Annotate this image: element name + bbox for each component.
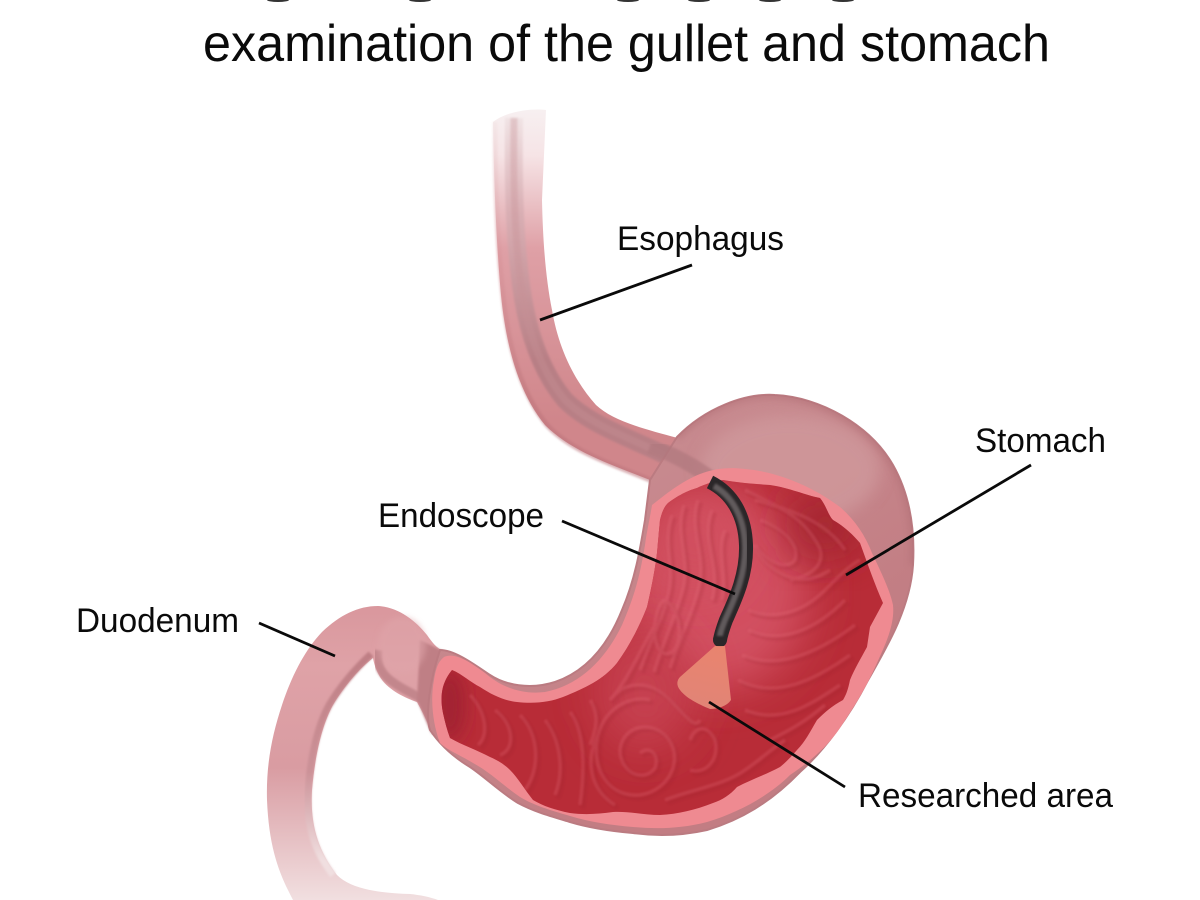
label: Esophagus (540, 220, 784, 320)
esophagus overlap on fundus (650, 446, 716, 482)
label: Duodenum: Duodenum (76, 602, 239, 640)
label: Duodenum (76, 602, 335, 656)
mucosal folds (634, 505, 800, 672)
stomach outer wall (428, 395, 913, 835)
clipped title remnants (267, 0, 854, 2)
label: Stomach (846, 422, 1106, 575)
stomach cavity with folds (442, 480, 883, 815)
label: Researched area: Researched area (858, 777, 1113, 815)
label: Esophagus: Esophagus (617, 220, 784, 258)
duodenum (267, 606, 445, 900)
label: Researched area (709, 702, 1113, 815)
label: Endoscope: Endoscope (378, 497, 544, 535)
researched area cone (677, 646, 731, 709)
endoscope (710, 482, 746, 647)
stomach mucosa (432, 468, 893, 828)
label: Endoscope (378, 497, 735, 594)
label: Stomach: Stomach (975, 422, 1106, 460)
subtitle: examination of the gullet and stomach (203, 15, 1050, 73)
esophagus (493, 110, 715, 482)
